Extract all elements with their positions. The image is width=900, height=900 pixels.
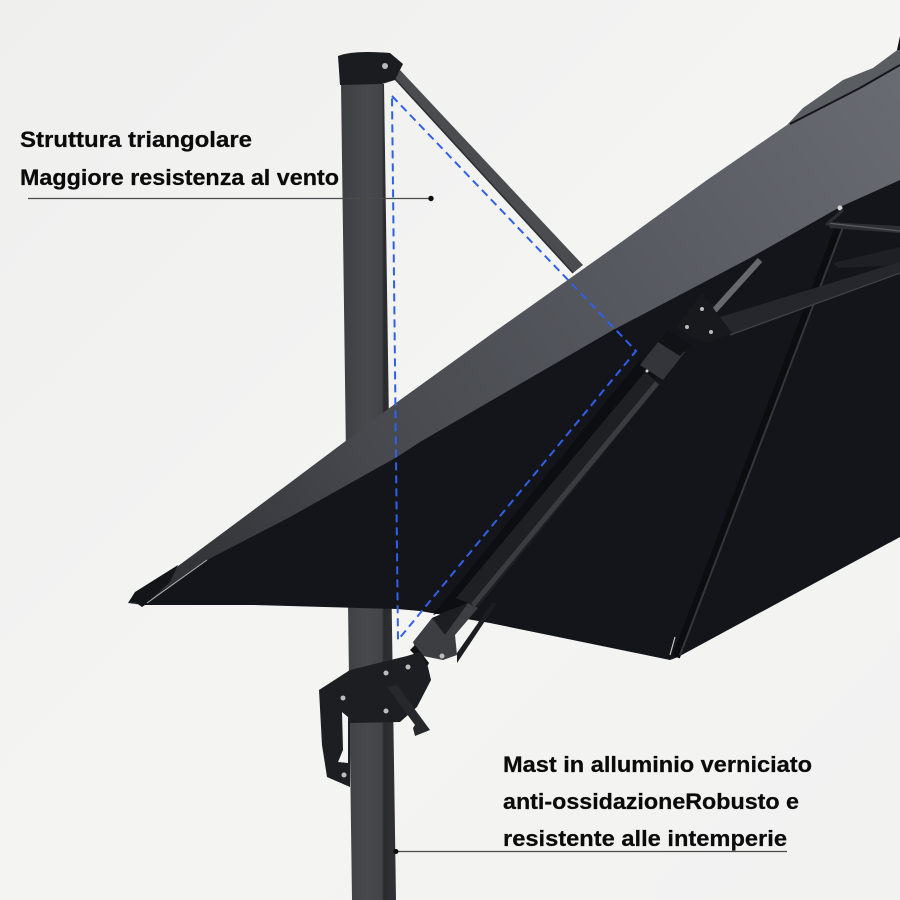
canopy vent flap — [787, 36, 900, 125]
callout: aluminium mast — [394, 752, 812, 854]
crank bracket — [319, 652, 431, 787]
callout: aluminium mast: anti-ossidazioneRobusto e — [503, 789, 799, 814]
triangular support strut — [395, 70, 583, 273]
callout: triangular structure — [20, 127, 434, 201]
callout: aluminium mast: Mast in alluminio verniciato — [503, 752, 812, 777]
canopy ribs — [670, 206, 900, 657]
arm hinge joint — [640, 293, 732, 380]
mast top cap — [338, 52, 403, 85]
callout: aluminium mast: resistente alle intemperie — [503, 826, 787, 851]
mast pole — [341, 84, 396, 900]
blue dashed triangle — [392, 96, 636, 640]
telescopic arm — [410, 260, 760, 667]
canopy top surface — [128, 65, 900, 605]
canopy underside — [143, 170, 900, 660]
callout: triangular structure: Maggiore resistenza al vento — [20, 165, 339, 190]
callout: triangular structure: Struttura triangolare — [20, 127, 252, 152]
canopy tip frame — [128, 560, 207, 607]
